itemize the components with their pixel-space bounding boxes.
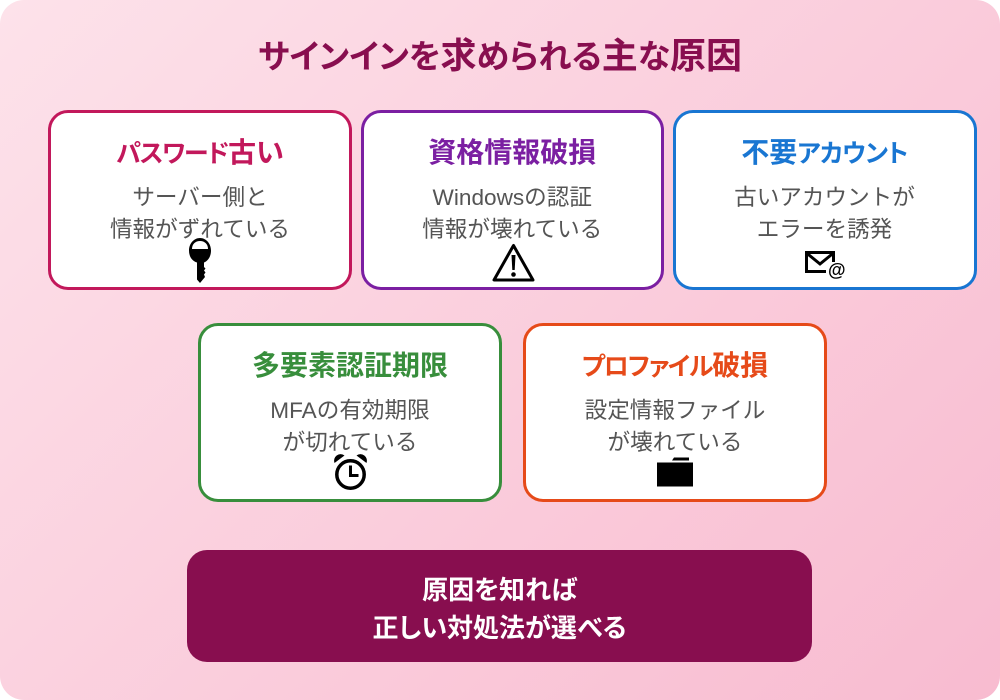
text: password: 情報がずれている: [110, 217, 290, 242]
heading: credentials: 資格情報破損: [428, 137, 596, 168]
icon: folder: [657, 458, 693, 486]
text: profile: 設定情報ファイル: [585, 398, 765, 423]
text: unused account: 古いアカウントが: [734, 185, 915, 210]
text: password: [110, 185, 290, 242]
callout: 原因を知れば: [422, 575, 577, 605]
panel: password: [48, 110, 352, 290]
callout: 正しい対処法が選べる: [372, 613, 626, 643]
title: サインインを求められる主な原因: [258, 35, 742, 76]
heading: password: パスワード古い: [116, 137, 284, 168]
heading: unused account: 不要アカウント: [741, 137, 908, 168]
heading: MFA: 多要素認証期限: [252, 350, 448, 381]
panel: MFA: [198, 323, 502, 502]
text: unused account: エラーを誘発: [757, 217, 892, 242]
icon: mail: [805, 251, 845, 280]
text: unused account: [734, 185, 915, 242]
text: MFA: MFAの有効期限: [270, 398, 430, 423]
icon: key: [189, 238, 211, 283]
icon: warning: [492, 244, 534, 282]
text: MFA: [270, 398, 430, 455]
text: MFA: が切れている: [283, 430, 417, 455]
text: credentials: 情報が壊れている: [422, 217, 602, 242]
icon: alarm clock: [334, 454, 367, 490]
text: credentials: [422, 185, 602, 242]
heading: profile: プロファイル破損: [582, 350, 768, 381]
panel: credentials: [360, 110, 664, 290]
icon: mail: @: [828, 260, 845, 280]
panel: profile: [523, 323, 827, 502]
text: profile: [585, 398, 765, 455]
text: password: サーバー側と: [132, 185, 268, 210]
callout: [187, 550, 812, 662]
panel: unused account: [672, 110, 976, 290]
text: profile: が壊れている: [608, 430, 742, 455]
text: credentials: Windowsの認証: [433, 185, 592, 210]
